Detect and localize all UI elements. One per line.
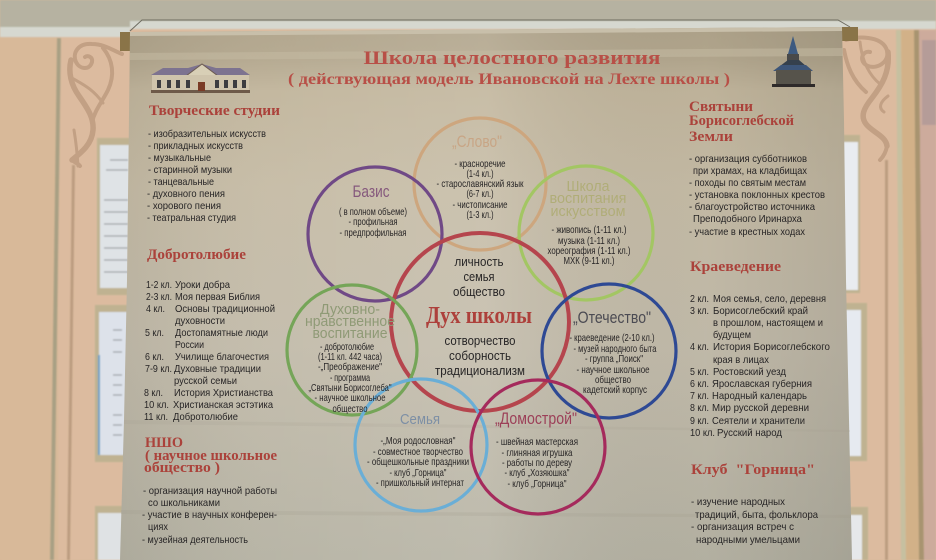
list: shrines activities: - установка поклонных крестов [689,189,825,201]
list: club activities: традиций, быта, фольклора [695,509,818,521]
text: Школа воспитания искусством [548,179,630,267]
list: local studies courses: Мир русской деревни [712,402,809,414]
list: Добротолюбие courses: России [175,339,204,351]
list: Добротолюбие courses: Духовные традиции [174,363,261,375]
list: shrines activities: - организация субботников [689,153,807,165]
text: Духовно-нравственное воспитание: общество [332,403,368,415]
circle: Школа воспитания искусством [519,166,653,300]
list: studios: - прикладных искусств [148,140,243,152]
text: Семья: - совместное творчество [373,446,463,458]
text: Отечество: „Отечество" [573,308,651,327]
icon: right ornament [844,38,888,160]
list: local studies courses: 3 кл. [690,305,709,317]
circle: Базис [308,167,442,301]
circle: Отечество [542,284,676,418]
list: shrines activities: - участие в крестных ходах [689,226,806,238]
text: Духовно-нравственное воспитание: - научное школьное [314,392,386,404]
text: Слово: - чистописание [452,199,508,211]
list: НШО activities: - музейная деятельность [142,534,248,546]
list: Добротолюбие courses: 2-3 кл. [146,291,172,303]
text: Базис: - предпрофильная [340,227,406,239]
list: Добротолюбие courses: 4 кл. [146,303,165,315]
list: local studies courses: 6 кл. [690,378,709,390]
list: local studies courses: будущем [713,329,751,341]
title: Школа целостного развития [364,48,660,69]
list: local studies courses: 7 кл. [690,390,709,402]
text: Слово: „Слово" [452,132,502,151]
list: local studies courses: края в лицах [713,354,770,366]
list: studios: - хорового пения [147,200,221,212]
list: club activities: - организация встреч с [691,521,794,533]
text: Духовно-нравственное воспитание: -„Преображение" [318,361,382,373]
text: Дух школы centre: общество [453,284,505,299]
list: local studies courses: Борисоглебский край [713,305,808,317]
list: Добротолюбие courses: 8 кл. [144,387,163,399]
text: Семья: - пришкольный интернат [376,477,464,489]
list: НШО activities: циях [148,521,169,533]
subtitle: ( действующая модель Ивановской на Лехте школы ) [288,71,730,88]
list: Добротолюбие courses: 5 кл. [145,327,164,339]
list: Добротолюбие courses: Уроки добра [175,279,230,291]
text: Слово: - старославянский язык [436,178,524,190]
text: Домострой: - клуб „Горница" [508,478,567,490]
list: studios: - духовного пения [147,188,225,200]
list: club activities: - изучение народных [691,496,786,508]
icon: left ornament [70,44,122,166]
list: local studies courses: Ростовский уезд [713,366,786,378]
list: local studies courses: История Борисоглебского [713,341,830,353]
heading: Святыни Борисоглебской Земли: Святыни [689,99,753,115]
list: local studies courses: 4 кл. [690,341,709,353]
text: Отечество: - группа „Поиск" [585,353,643,365]
text: Слово [436,132,524,221]
list: shrines activities [689,153,825,238]
list: local studies courses [690,293,830,439]
list: НШО activities [142,485,277,546]
poster background [120,27,852,560]
heading: Добротолюбие: Добротолюбие [147,247,246,263]
hanging wire and brackets [120,20,858,51]
list: Добротолюбие courses: 1-2 кл. [146,279,172,291]
heading: Святыни Борисоглебской Земли: Земли [689,129,733,145]
list: НШО activities: - организация научной работы [143,485,277,497]
heading: Краеведение: Краеведение [690,259,781,275]
list: studios: - танцевальные [148,176,214,188]
list: studios: - театральная студия [147,212,236,224]
text: Школа воспитания искусством: МХК (9-11 кл.) [564,255,614,267]
list: Добротолюбие courses [144,279,275,423]
text: Школа воспитания искусством: - живопись (1-11 кл.) [552,224,626,236]
text: Дух школы centre: семья [464,269,494,284]
text: Домострой: - работы по дереву [502,457,573,469]
text: Отечество: - музей народного быта [574,343,657,355]
text: Базис: Базис [352,182,390,201]
circle: Домострой [471,380,605,514]
text: Школа воспитания искусством: воспитания [550,191,626,207]
list: Добротолюбие courses: 11 кл. [144,411,168,423]
list: studios [147,128,266,224]
text: Домострой: - клуб „Хозяюшка" [504,467,570,479]
text: Слово: (1-3 кл.) [466,209,494,221]
text: Слово: (6-7 кл.) [466,188,494,200]
text: Дух школы centre: личность [454,254,504,269]
text: Семья: -„Моя родословная" [380,435,456,447]
list: Добротолюбие courses: русской семьи [174,375,237,387]
text: Дух школы centre: Дух школы [426,303,532,329]
list: local studies courses: 5 кл. [690,366,709,378]
text: Базис [339,182,407,239]
list: Добротолюбие courses: Основы традиционной [175,303,275,315]
list: local studies courses: Русский народ [717,427,782,439]
text: Домострой: „Домострой" [495,409,577,428]
list: local studies courses: Моя семья, село, деревня [713,293,826,305]
text: Духовно-нравственное воспитание: воспитание [312,326,388,342]
text: Базис: - профильная [348,216,398,228]
list: Добротолюбие courses: Моя первая Библия [175,291,260,303]
list: НШО activities: со школьниками [148,497,220,509]
heading: Творческие студии: Творческие студии [149,103,280,119]
text: Домострой [495,409,578,490]
list: Добротолюбие courses: Добротолюбие [173,411,238,423]
text: Слово: (1-4 кл.) [466,168,494,180]
list: local studies courses: Ярославская губерния [712,378,812,390]
circle: Духовно-нравственное воспитание [287,285,417,415]
list: Добротолюбие courses: 6 кл. [145,351,164,363]
list: club activities: народными умельцами [696,534,800,546]
list: local studies courses: 9 кл. [690,415,709,427]
text: Домострой: - глиняная игрушка [502,447,573,459]
text: Дух школы centre: соборность [449,348,511,363]
icon: school building [151,64,250,93]
list: shrines activities: - походы по святым местам [689,177,806,189]
circle: Семья [355,379,487,511]
icon: wooden church [772,36,815,87]
list: studios: - изобразительных искусств [148,128,266,140]
list: studios: - старинной музыки [148,164,232,176]
text: Духовно-нравственное воспитание [305,302,395,415]
text: Отечество: общество [595,374,631,386]
heading: Клуб Горница: Клуб "Горница" [691,462,815,478]
list: Добротолюбие courses: Христианская эстэтика [173,399,273,411]
text: Отечество [570,308,657,396]
text: Слово: - красноречие [454,158,506,170]
text: Школа воспитания искусством: искусством [550,204,626,220]
text: Семья: Семья [400,412,440,428]
list: Добротолюбие courses: духовности [175,315,225,327]
heading: НШО [144,435,277,476]
list: local studies courses: в прошлом, настоящем и [713,317,823,329]
text: Отечество: - научное школьное [576,364,650,376]
text: Школа воспитания искусством: музыка (1-11 кл.) [558,235,620,247]
panel: right column [689,99,830,546]
list: local studies courses: 2 кл. [690,293,709,305]
text: Дух школы centre: традиционализм [435,363,525,378]
text: Духовно-нравственное воспитание: - программа [330,372,370,384]
text: Школа воспитания искусством: Школа [566,179,610,195]
list: НШО activities: - участие в научных конферен- [142,509,277,521]
list: local studies courses: Народный календарь [712,390,807,402]
text: Духовно-нравственное воспитание: „Святыни Борисоглеба" [308,382,392,394]
text: Отечество: - краеведение (2-10 кл.) [570,332,654,344]
text: Дух школы centre: сотворчество [444,333,516,348]
list: Добротолюбие courses: Достопамятные люди [175,327,268,339]
text: Духовно-нравственное воспитание: - добротолюбие [320,341,374,353]
list: local studies courses: 8 кл. [690,402,709,414]
heading: НШО: НШО [145,435,183,451]
list: local studies courses: 10 кл. [690,427,715,439]
text: Духовно-нравственное воспитание: нравственное [305,314,395,330]
title [288,48,730,88]
text: Семья: - общешкольные праздники [367,456,469,468]
circle: Слово [414,118,546,250]
list: Добротолюбие courses: История Христианства [174,387,273,399]
list: shrines activities: Преподобного Иринарха [693,213,802,225]
chart: overlapping circles diagram [287,118,676,514]
heading: НШО: ( научное школьное [145,448,277,464]
text: Семья [367,412,469,489]
list: local studies courses: Сеятели и хранители [712,415,805,427]
text: Школа воспитания искусством: хореография (1-11 кл.) [548,245,630,257]
text: Дух школы centre [426,254,532,378]
text: Отечество: кадетский корпус [583,384,647,396]
heading: НШО: общество ) [144,460,220,476]
text: Духовно-нравственное воспитание: (1-11 кл. 442 часа) [318,351,382,363]
text: Базис: ( в полном объеме) [339,206,407,218]
circle: Дух школы [391,233,569,411]
list: shrines activities: - благоустройство источника [689,201,815,213]
heading: Святыни Борисоглебской Земли: Борисоглебской [689,113,794,129]
list: shrines activities: при храмах, на кладбищах [693,165,808,177]
list: studios: - музыкальные [148,152,211,164]
document sheets behind poster [95,135,868,560]
list: Добротолюбие courses: 7-9 кл. [145,363,172,375]
panel: left column [142,103,280,546]
text: Духовно-нравственное воспитание: Духовно- [320,302,380,318]
list: club activities [691,496,818,546]
text: Домострой: - швейная мастерская [496,436,578,448]
list: Добротолюбие courses: Училище благочестия [175,351,269,363]
list: Добротолюбие courses: 10 кл. [144,399,169,411]
text: Семья: - клуб „Горница" [390,467,447,479]
heading: Святыни Борисоглебской Земли [689,99,794,145]
